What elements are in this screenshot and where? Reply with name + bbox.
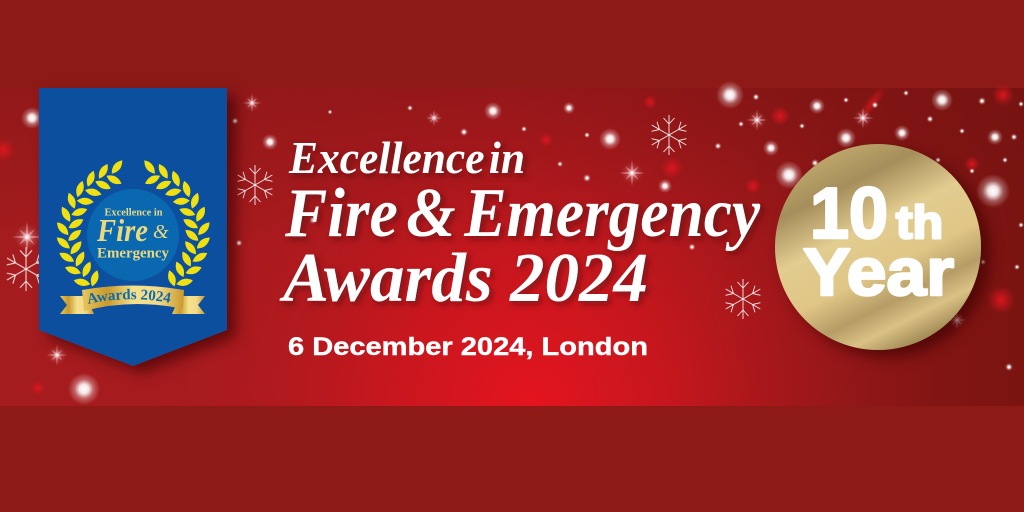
blue pennant badge xyxy=(37,88,247,379)
bokeh lights xyxy=(21,81,1024,405)
event date and location: 6 December 2024, London xyxy=(288,333,648,361)
red glows xyxy=(0,82,1015,395)
badge inner circle with title: Fire xyxy=(96,212,148,248)
central festive red panel xyxy=(0,88,1024,406)
main heading: Excellence in xyxy=(288,132,525,183)
laurel wreath xyxy=(54,158,212,287)
gold ribbon with Awards 2024 xyxy=(60,286,205,314)
badge inner circle with title: Emergency xyxy=(97,246,169,262)
main heading: Fire & Emergency xyxy=(284,175,761,252)
gold 10th year medal: 10 xyxy=(810,174,888,254)
star sparkles xyxy=(11,93,967,366)
gold 10th year medal: th xyxy=(896,196,943,248)
gold ribbon with Awards 2024: Awards 2024 xyxy=(88,288,170,304)
gold 10th year medal: Year xyxy=(803,235,954,310)
badge inner circle with title: Excellence in xyxy=(104,208,163,218)
main heading: Awards 2024 xyxy=(279,240,648,317)
gold 10th year medal xyxy=(775,144,981,350)
main heading xyxy=(279,132,761,317)
badge inner circle with title: & xyxy=(153,221,169,243)
icon: snowflakes xyxy=(4,115,763,319)
badge inner circle with title xyxy=(87,189,179,281)
